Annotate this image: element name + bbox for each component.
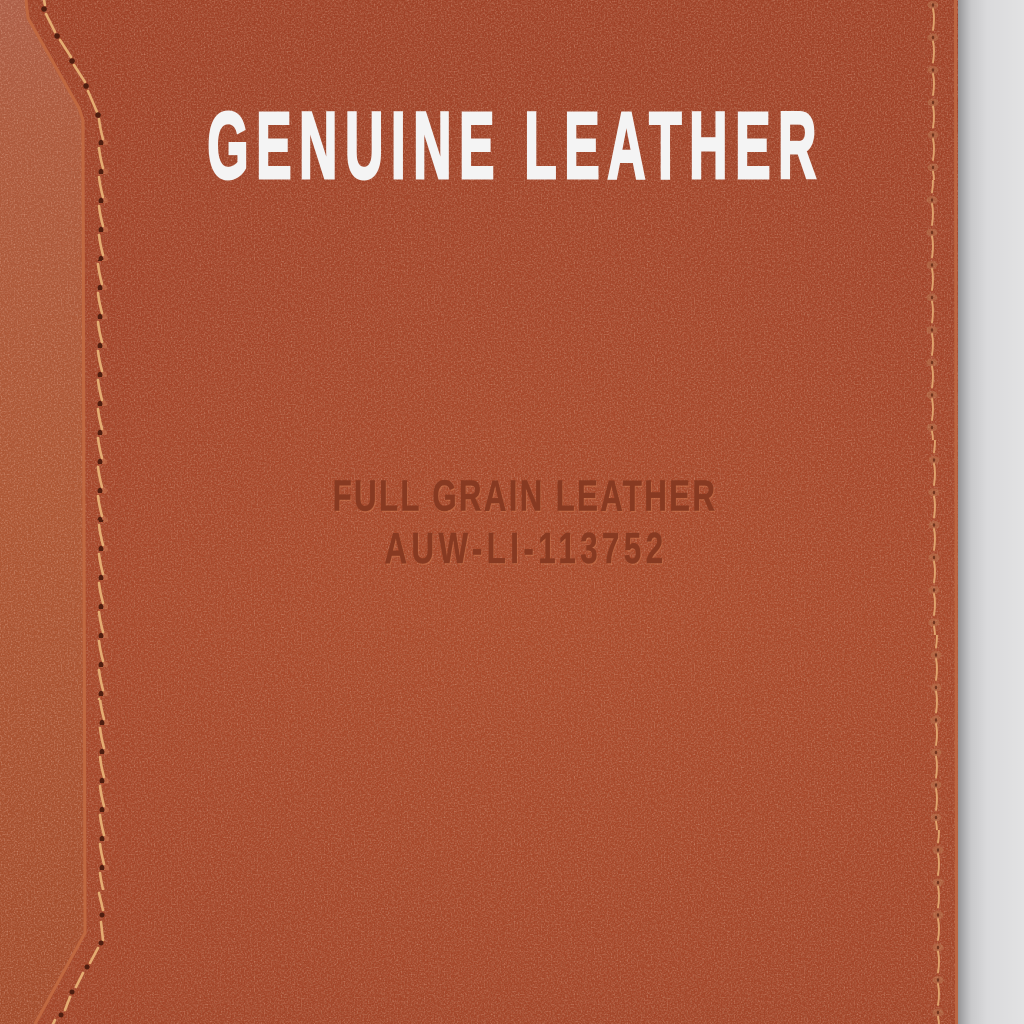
embossed line one: FULL GRAIN LEATHER — [333, 473, 715, 521]
grey background surface — [958, 0, 1024, 1024]
right edge highlight — [956, 0, 957, 1024]
left stitching — [44, 0, 113, 1024]
stitches along upper slant — [44, 0, 97, 112]
stitches along lower slant — [53, 893, 103, 1024]
vertical stitches — [96, 118, 112, 260]
embossed line two: AUW-LI-113752 — [384, 525, 663, 573]
embossed text — [333, 473, 716, 575]
panel: under pocket leather — [0, 0, 100, 1024]
embossed line one: FULL GRAIN LEATHER — [334, 474, 716, 522]
pocket edge highlight — [26, 0, 85, 1024]
embossed line two: AUW-LI-113752 — [385, 527, 664, 575]
right stitching — [920, 0, 950, 1024]
title: GENUINE LEATHER — [207, 93, 816, 199]
